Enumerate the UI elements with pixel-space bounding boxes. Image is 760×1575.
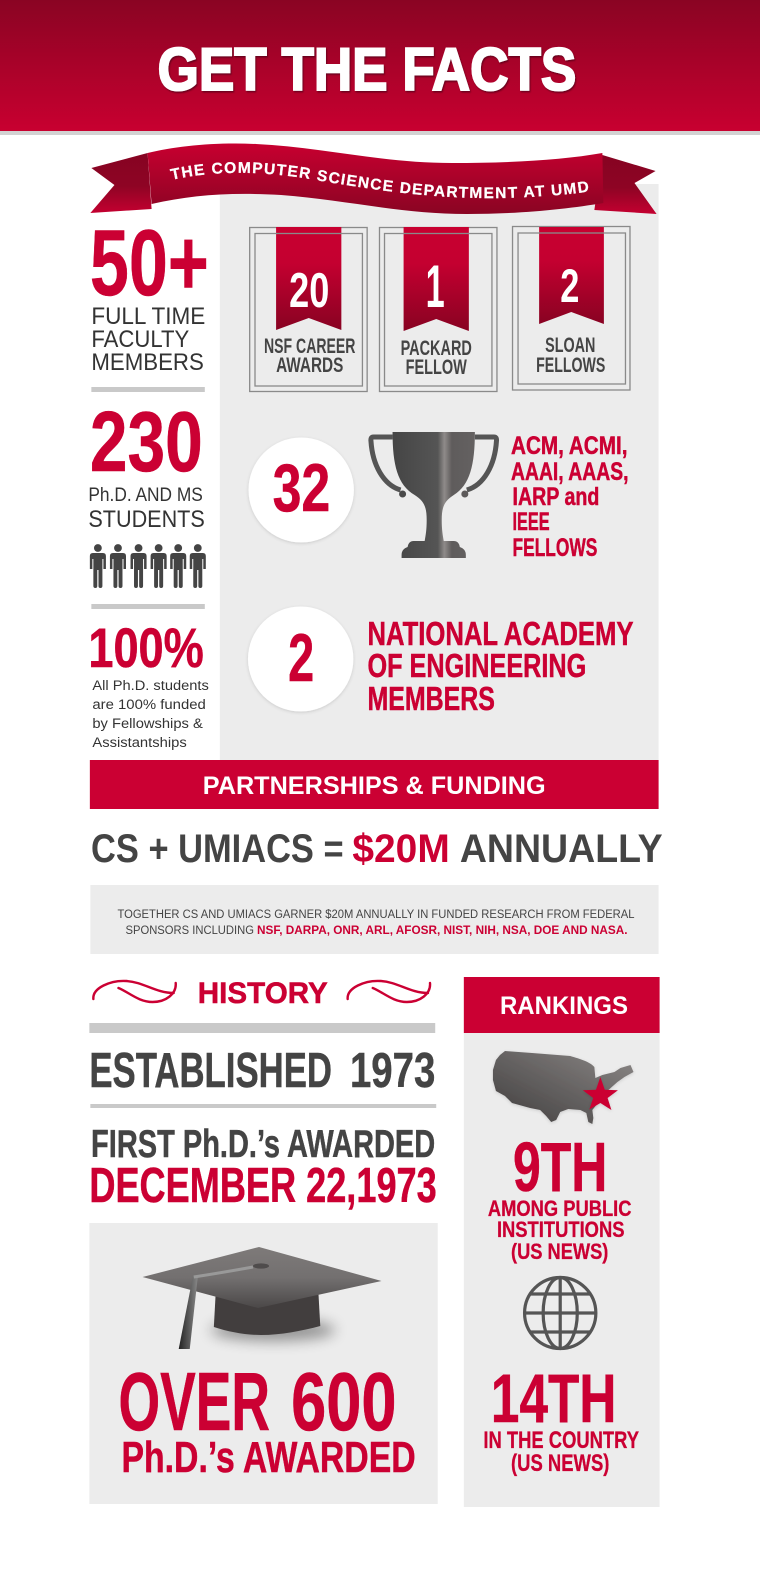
text: 14th: IN THE COUNTRY (483, 1427, 639, 1454)
award: Packard: FELLOW (406, 356, 467, 379)
stat: funding: 100% (88, 616, 204, 679)
text: national academy: OF ENGINEERING (367, 648, 586, 685)
icon: left flourish (93, 981, 176, 1002)
stat: funding: by Fellowships & (92, 715, 203, 731)
panel: rankings: RANKINGS (500, 992, 628, 1020)
text: 14th (483, 1359, 639, 1477)
heading: partnerships and funding: PARTNERSHIPS & FUNDING (203, 772, 546, 800)
panel: funding text (90, 885, 659, 954)
panel: funding text: NSF, DARPA, ONR, ARL, AFOSR, NIST, NIH, NSA, DOE AND NASA. (257, 923, 627, 937)
award: Packard (379, 227, 497, 392)
stat: faculty: FULL TIME (91, 303, 205, 330)
text: fellows: ACM, ACMI, (511, 432, 627, 460)
panel: PhDs awarded: 600 (291, 1355, 397, 1448)
stat: students: 230 (90, 395, 203, 490)
icon: trophy (371, 432, 497, 558)
text: first PhD awarded (89, 1123, 437, 1213)
stat: faculty: 50+ (90, 210, 209, 315)
text: 9th: 9TH (513, 1128, 607, 1206)
stat: faculty: FACULTY (91, 326, 189, 353)
award: Sloan: FELLOWS (536, 354, 605, 377)
icon: globe (525, 1278, 596, 1348)
text: national academy: NATIONAL ACADEMY (367, 616, 634, 653)
award: Sloan: 2 (560, 259, 579, 312)
title: GET THE FACTS (158, 36, 576, 103)
panel: funding text: TOGETHER CS AND UMIACS GARNER $20M ANNUALLY IN FUNDED RESEARCH FROM FEDERAL (117, 907, 635, 921)
funding headline: $20M (352, 827, 450, 871)
funding headline: ANNUALLY (460, 827, 663, 871)
text: established: 1973 (350, 1044, 435, 1098)
award: Sloan: SLOAN (545, 334, 595, 357)
stat: funding: are 100% funded (92, 696, 206, 712)
stat: faculty: MEMBERS (91, 349, 204, 376)
stat: funding (88, 616, 209, 750)
text: 9th: INSTITUTIONS (497, 1217, 624, 1242)
award: Packard: PACKARD (401, 337, 472, 360)
heading: rankings (464, 977, 660, 1033)
badge: 2 (248, 606, 353, 712)
text: national academy (367, 616, 634, 718)
award: NSF career (250, 227, 367, 392)
panel: faculty honors background (220, 184, 659, 760)
text: fellows (511, 432, 628, 562)
ribbon text: THE COMPUTER SCIENCE DEPARTMENT AT UMD (170, 162, 588, 198)
award: NSF career: 20 (289, 264, 329, 318)
panel: PhDs awarded (89, 1223, 438, 1504)
text: first PhD awarded: DECEMBER 22,1973 (89, 1159, 437, 1213)
panel: rankings (464, 977, 660, 1507)
stat: faculty (90, 210, 209, 376)
stat: students: Ph.D. AND MS (88, 485, 203, 506)
icon: US map with star (493, 1051, 634, 1124)
panel: funding text: SPONSORS INCLUDING (125, 923, 254, 937)
funding headline (91, 827, 663, 871)
text: established: ESTABLISHED (89, 1044, 332, 1098)
funding headline: CS + UMIACS = (91, 827, 344, 871)
icon: graduation cap (143, 1247, 382, 1349)
text: 14th: 14TH (491, 1359, 616, 1437)
text: first PhD awarded: FIRST Ph.D.’s AWARDED (91, 1123, 435, 1166)
award: NSF career: NSF CAREER (264, 335, 355, 358)
text: national academy: MEMBERS (367, 681, 495, 718)
icon: six people (90, 544, 206, 588)
badge: 2: 2 (288, 620, 314, 696)
badge: 32: 32 (273, 450, 330, 526)
text: 14th: (US NEWS) (511, 1450, 609, 1477)
award: Sloan (513, 226, 630, 390)
heading: history: HISTORY (198, 977, 328, 1010)
badge: 32 (248, 438, 354, 542)
header band (0, 0, 760, 135)
stat: students: STUDENTS (88, 506, 205, 533)
ribbon banner (90, 144, 656, 214)
stat: funding: Assistantships (92, 734, 187, 750)
stat: funding: All Ph.D. students (92, 677, 209, 693)
text: fellows: IEEE (513, 508, 550, 536)
award: Packard: 1 (426, 253, 445, 320)
panel: PhDs awarded: Ph.D.’s AWARDED (121, 1433, 416, 1482)
text: fellows: FELLOWS (513, 534, 597, 562)
text: 9th (488, 1128, 631, 1264)
award: NSF career: AWARDS (276, 354, 343, 377)
icon: right flourish (348, 981, 430, 1002)
text: fellows: IARP and (513, 483, 599, 511)
text: 9th: (US NEWS) (511, 1239, 608, 1264)
stat: students (88, 395, 205, 533)
text: over 600: OVER (118, 1355, 270, 1448)
text: 9th: AMONG PUBLIC (488, 1196, 631, 1221)
heading: partnerships and funding (90, 760, 659, 809)
text: fellows: AAAI, AAAS, (511, 458, 628, 486)
